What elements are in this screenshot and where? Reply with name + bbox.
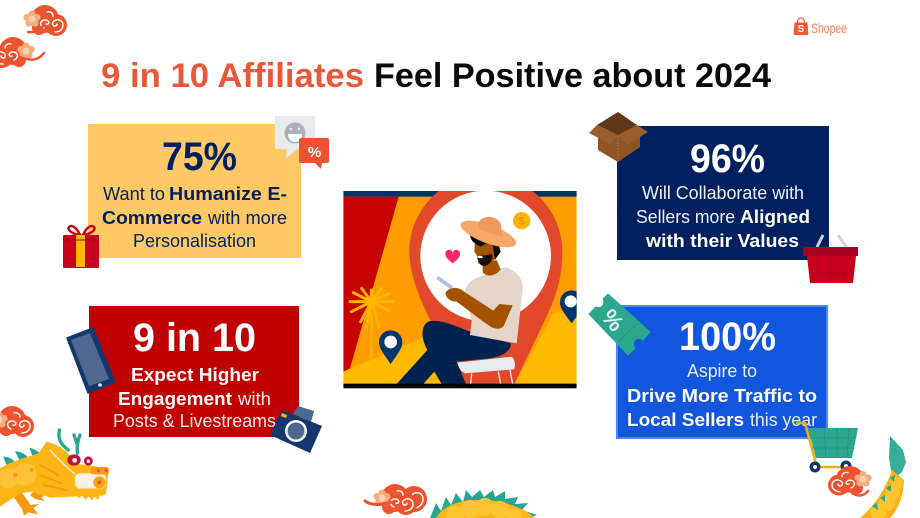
description: local sellers: this year: [750, 410, 817, 430]
background: yellow ground: [343, 306, 577, 388]
small pin left: [379, 330, 402, 364]
body and head: [0, 442, 108, 507]
cloud: bottom right: [828, 466, 872, 495]
title: 9 in 10 Affiliates: [101, 57, 364, 95]
map pin: [409, 191, 562, 388]
icon: smiley speech bubble: [275, 116, 315, 158]
description: local sellers: Drive More Traffic to: [627, 386, 817, 406]
title: Feel Positive about 2024: [374, 57, 771, 95]
dragon: bottom left: [0, 430, 109, 516]
description: humanize e-commerce: [102, 184, 287, 251]
arm: [445, 288, 513, 329]
icon: discount ticket: %: [596, 304, 630, 336]
icon: camera: [270, 406, 322, 453]
description: humanize e-commerce: Commerce: [102, 208, 202, 228]
icon: gift box: [63, 226, 99, 268]
icon: shopping cart: [797, 423, 858, 472]
dragon: bottom centre: [430, 490, 537, 518]
description: aligned with values: Aligned: [740, 207, 810, 227]
antlers: [59, 430, 80, 453]
palm tree: [350, 288, 393, 358]
teeth: [74, 491, 105, 500]
neck: [483, 260, 501, 275]
description: aligned with values: [636, 183, 810, 251]
panel: 96% collaborate with sellers: [617, 126, 829, 260]
phone: [436, 276, 453, 289]
whisker: [50, 450, 75, 474]
stat: 9 in 10: 9 in 10: [133, 316, 256, 360]
panel: 75% humanize e-commerce: [88, 124, 301, 258]
description: local sellers: Aspire to: [687, 361, 757, 381]
face: [474, 243, 498, 264]
snout: [75, 473, 106, 488]
description: posts and livestreams: Posts & Livestreams: [113, 411, 276, 431]
icon: percent speech bubble: [299, 138, 329, 169]
illustration: affiliate on phone in map pin: $: [519, 216, 525, 228]
description: humanize e-commerce: Want to: [103, 184, 165, 204]
cloud: bottom centre: [365, 484, 427, 515]
small pin right: [560, 290, 577, 324]
cloud: top left upper: [23, 5, 67, 36]
stat: 96%: 96%: [690, 137, 765, 181]
dragon: bottom right tail: [860, 436, 906, 518]
panel: 9 in 10 higher engagement: [89, 306, 299, 437]
stat: 100%: 100%: [679, 315, 776, 359]
hair: [470, 236, 501, 260]
icon: cardboard box: [589, 112, 648, 162]
nose: [91, 467, 109, 474]
panel: 100% drive traffic: [617, 306, 827, 438]
description: humanize e-commerce: Personalisation: [133, 231, 256, 251]
trousers: [397, 321, 511, 384]
description: posts and livestreams: [113, 365, 276, 431]
logo: Shopee: S: [798, 24, 805, 35]
background: red wedge: [343, 197, 399, 372]
body scales: [0, 463, 36, 488]
icon: smartphone: [67, 328, 115, 393]
icon: red shopping basket: [803, 235, 858, 283]
spines: [3, 448, 42, 466]
description: humanize e-commerce: with more: [207, 208, 287, 228]
legs: [13, 490, 46, 516]
beard: [478, 253, 492, 266]
description: posts and livestreams: Engagement: [118, 389, 232, 409]
description: aligned with values: Will Collaborate with: [642, 183, 804, 203]
illustration: affiliate on phone in map pin: [343, 191, 577, 388]
icon: discount ticket: [589, 294, 650, 355]
cloud: top left lower: [0, 37, 44, 68]
description: posts and livestreams: Expect Higher: [131, 365, 259, 385]
description: humanize e-commerce: Humanize E-: [169, 184, 287, 204]
description: aligned with values: with their Values: [645, 231, 799, 251]
title: [101, 57, 771, 95]
description: aligned with values: Sellers more: [636, 207, 735, 227]
description: local sellers: [627, 361, 817, 430]
heart: [445, 250, 460, 263]
stat: 75%: 75%: [162, 135, 237, 179]
shirt: [464, 267, 523, 343]
stool: [457, 357, 515, 373]
icon: percent speech bubble: %: [308, 144, 321, 161]
hat: [460, 220, 516, 248]
cloud: left middle: [0, 406, 34, 437]
description: posts and livestreams: with: [237, 389, 271, 409]
top bar: [343, 191, 577, 197]
description: local sellers: Local Sellers: [627, 410, 744, 430]
eyes: [67, 454, 81, 466]
coin: [513, 212, 530, 229]
logo: Shopee: Shopee: [811, 21, 847, 36]
bottom bar: [343, 384, 577, 388]
logo: Shopee: [794, 18, 847, 36]
